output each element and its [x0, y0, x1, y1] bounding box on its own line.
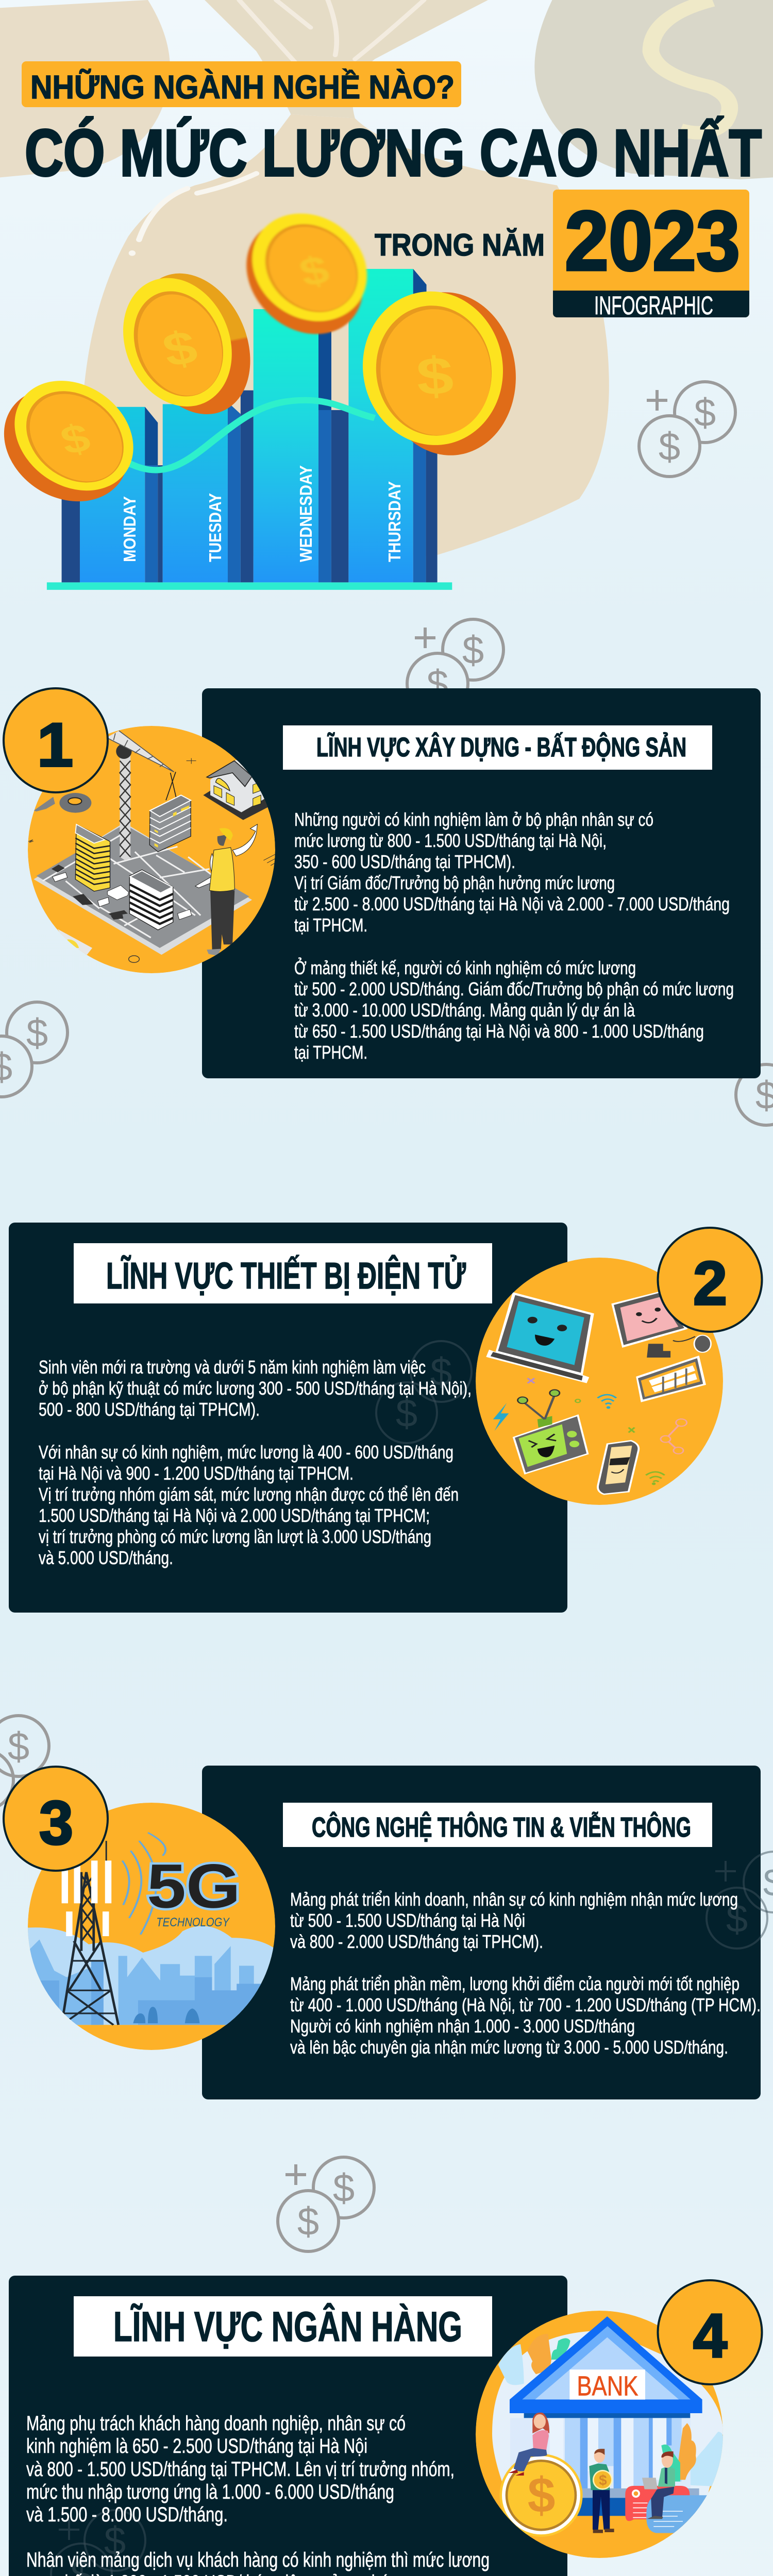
number badge 3: 3: [39, 1788, 73, 1857]
faint coins electronics: $: [430, 1350, 452, 1394]
text block: electronics: ở bộ phận kỹ thuật có mức lương 300 - 500 USD/tháng tại Hà Nội),: [39, 1378, 472, 1399]
subtitle badge: NHỮNG NGÀNH NGHỀ NÀO?: [30, 69, 455, 106]
text block: banking: mức thu nhập tương ứng là 1.000 - 6.000 USD/tháng: [26, 2481, 394, 2503]
icon: coins F: [278, 2157, 374, 2251]
faint coins telecom: [707, 1852, 773, 1948]
faint coins banking: [51, 2510, 145, 2576]
panel: IT and telecom: [202, 1766, 773, 2099]
big coin: [499, 2454, 583, 2537]
day labels: MONDAY: [120, 496, 139, 562]
heading: banking: LĨNH VỰC NGÂN HÀNG: [113, 2303, 462, 2350]
illustration: electronic devices: [476, 1258, 723, 1505]
text block: electronics: Với nhân sự có kinh nghiệm, mức lương là 400 - 600 USD/tháng: [39, 1442, 453, 1463]
icon: coins B: $: [462, 629, 484, 672]
text block: electronics: 1.500 USD/tháng tại Hà Nội và 2.000 USD/tháng tại TPHCM;: [39, 1505, 430, 1526]
heading: construction: [283, 725, 712, 770]
leaves right: [661, 2423, 696, 2482]
day labels: WEDNESDAY: [296, 465, 315, 562]
faint coins telecom: $: [726, 1897, 748, 1941]
text block: construction: mức lương từ 800 - 1.500 USD/tháng tại Hà Nội,: [294, 830, 607, 851]
panel: construction and real estate: [202, 688, 761, 1078]
text block: construction: Những người có kinh nghiệm làm ở bộ phận nhân sự có: [294, 809, 653, 830]
number badge 3: [4, 1767, 108, 1871]
day labels: TUESDAY: [206, 493, 225, 562]
text block: IT and telecom: Người có kinh nghiệm nhận 1.000 - 3.000 USD/tháng: [290, 2015, 635, 2037]
big coin: $: [528, 2468, 556, 2523]
illustration: construction: [28, 726, 275, 973]
illustration: bank: [476, 2311, 724, 2558]
bar chart with coins: [0, 199, 521, 590]
panel: electronics: [9, 1223, 567, 1613]
heading: electronics: [74, 1243, 492, 1303]
number badge 4: [658, 2280, 762, 2384]
man center: $: [599, 2472, 607, 2488]
icon: coins A: [639, 382, 735, 477]
text block: construction: từ 3.000 - 10.000 USD/tháng. Mảng quản lý dự án là: [294, 999, 635, 1021]
year badge: INFOGRAPHIC: [594, 291, 713, 320]
coin 2: $: [157, 320, 203, 377]
black white building: [129, 870, 173, 930]
icon: coins A: $: [694, 391, 716, 435]
gears: [59, 793, 91, 813]
crane: [120, 754, 130, 860]
icon: coins E: $: [8, 1725, 29, 1769]
coin 1: $: [56, 416, 95, 463]
day labels: THURSDAY: [385, 481, 404, 562]
red card and document: [625, 2486, 708, 2533]
text block: construction: tại TPHCM.: [294, 914, 367, 936]
year badge: [553, 190, 749, 320]
coin 1: [0, 364, 157, 519]
illustration: 5G tower and city: 5G: [147, 1851, 241, 1921]
text block: banking: [26, 2412, 490, 2576]
text block: electronics: Sinh viên mới ra trường và dưới 5 năm kinh nghiệm làm việc: [39, 1357, 426, 1378]
icon: coins E: [0, 1716, 49, 1810]
year line: TRONG NĂM: [375, 228, 545, 262]
coin 2: [109, 264, 267, 424]
text block: banking: và 800 - 1.500 USD/tháng tại TPHCM. Lên vị trí trưởng nhóm,: [26, 2458, 455, 2481]
panel: banking: [9, 2276, 567, 2576]
number badge 2: [658, 1228, 762, 1332]
coin 3: $: [294, 247, 334, 295]
man center: [589, 2449, 614, 2533]
icon: coins D: [736, 1064, 773, 1125]
text block: electronics: 500 - 800 USD/tháng tại TPHCM).: [39, 1399, 260, 1420]
number badge 1: 1: [37, 710, 73, 779]
day labels: [120, 465, 404, 562]
faint coins electronics: $: [396, 1392, 417, 1435]
icon: coins B: $: [427, 663, 448, 706]
hanging building: [149, 795, 191, 852]
tower: [59, 1872, 119, 2025]
text block: electronics: [39, 1357, 472, 1568]
text block: construction: tại TPHCM.: [294, 1042, 367, 1063]
man seated: [642, 2451, 675, 2519]
building yellow: [75, 824, 110, 891]
faint coins electronics: [376, 1341, 472, 1443]
text block: IT and telecom: [290, 1889, 761, 2058]
text block: construction: [294, 809, 734, 1063]
text block: banking: kinh nghiệm là 650 - 2.500 USD/tháng tại Hà Nội: [26, 2435, 367, 2458]
number badge 4: 4: [693, 2301, 727, 2370]
icon: coins B: [407, 619, 503, 714]
text block: construction: 350 - 600 USD/tháng tại TPHCM).: [294, 851, 515, 872]
heading: banking: [74, 2296, 492, 2357]
faint coins banking: $: [104, 2519, 126, 2563]
illustration: 5G tower and city: TECHNOLOGY: [156, 1915, 230, 1929]
text block: electronics: và 5.000 USD/tháng.: [39, 1547, 173, 1568]
year badge: 2023: [565, 194, 740, 288]
house: [203, 790, 268, 820]
number badge 2: 2: [693, 1249, 727, 1318]
icon: coins C: $: [26, 1011, 48, 1055]
coin 4: [358, 289, 521, 458]
text block: banking: Nhân viên mảng dịch vụ khách hàng có kinh nghiệm thì mức lương: [26, 2549, 490, 2571]
text block: electronics: tại Hà Nội và 900 - 1.200 USD/tháng tại TPHCM.: [39, 1463, 354, 1484]
woman: [509, 2413, 549, 2476]
text block: electronics: vị trí trưởng phòng có mức lương lần lượt là 3.000 USD/tháng: [39, 1526, 431, 1547]
text block: banking: và 1.500 - 8.000 USD/tháng.: [26, 2503, 228, 2526]
text block: construction: Ở mảng thiết kế, người có kinh nghiệm có mức lương: [294, 957, 636, 978]
worker: [210, 890, 234, 950]
icon: coins A: $: [659, 425, 680, 469]
heading: IT and telecom: [283, 1803, 712, 1847]
text block: banking: Mảng phụ trách khách hàng doanh nghiệp, nhân sự có: [26, 2412, 406, 2435]
icon: coins C: [0, 1002, 68, 1097]
text block: IT and telecom: và 800 - 2.000 USD/tháng tại TPHCM).: [290, 1931, 543, 1952]
icon: coins F: $: [297, 2200, 319, 2244]
icon: coins F: $: [333, 2166, 355, 2210]
text block: electronics: Vị trí trưởng nhóm giám sát, mức lương nhận được có thể lên đến: [39, 1484, 459, 1505]
coin 3: [226, 199, 386, 348]
illustration: 5G tower and city: [25, 1803, 281, 2050]
text block: IT and telecom: từ 500 - 1.500 USD/tháng tại Hà Nội: [290, 1910, 525, 1931]
coin 4: $: [415, 346, 455, 406]
text block: construction: Vị trí Giám đốc/Trưởng bộ phận hưởng mức lương: [294, 872, 615, 893]
illustration: bank: BANK: [577, 2370, 638, 2401]
money bag background illustration: [0, 0, 773, 556]
heading: electronics: LĨNH VỰC THIẾT BỊ ĐIỆN TỬ: [106, 1255, 466, 1297]
number badge 1: [4, 688, 108, 792]
